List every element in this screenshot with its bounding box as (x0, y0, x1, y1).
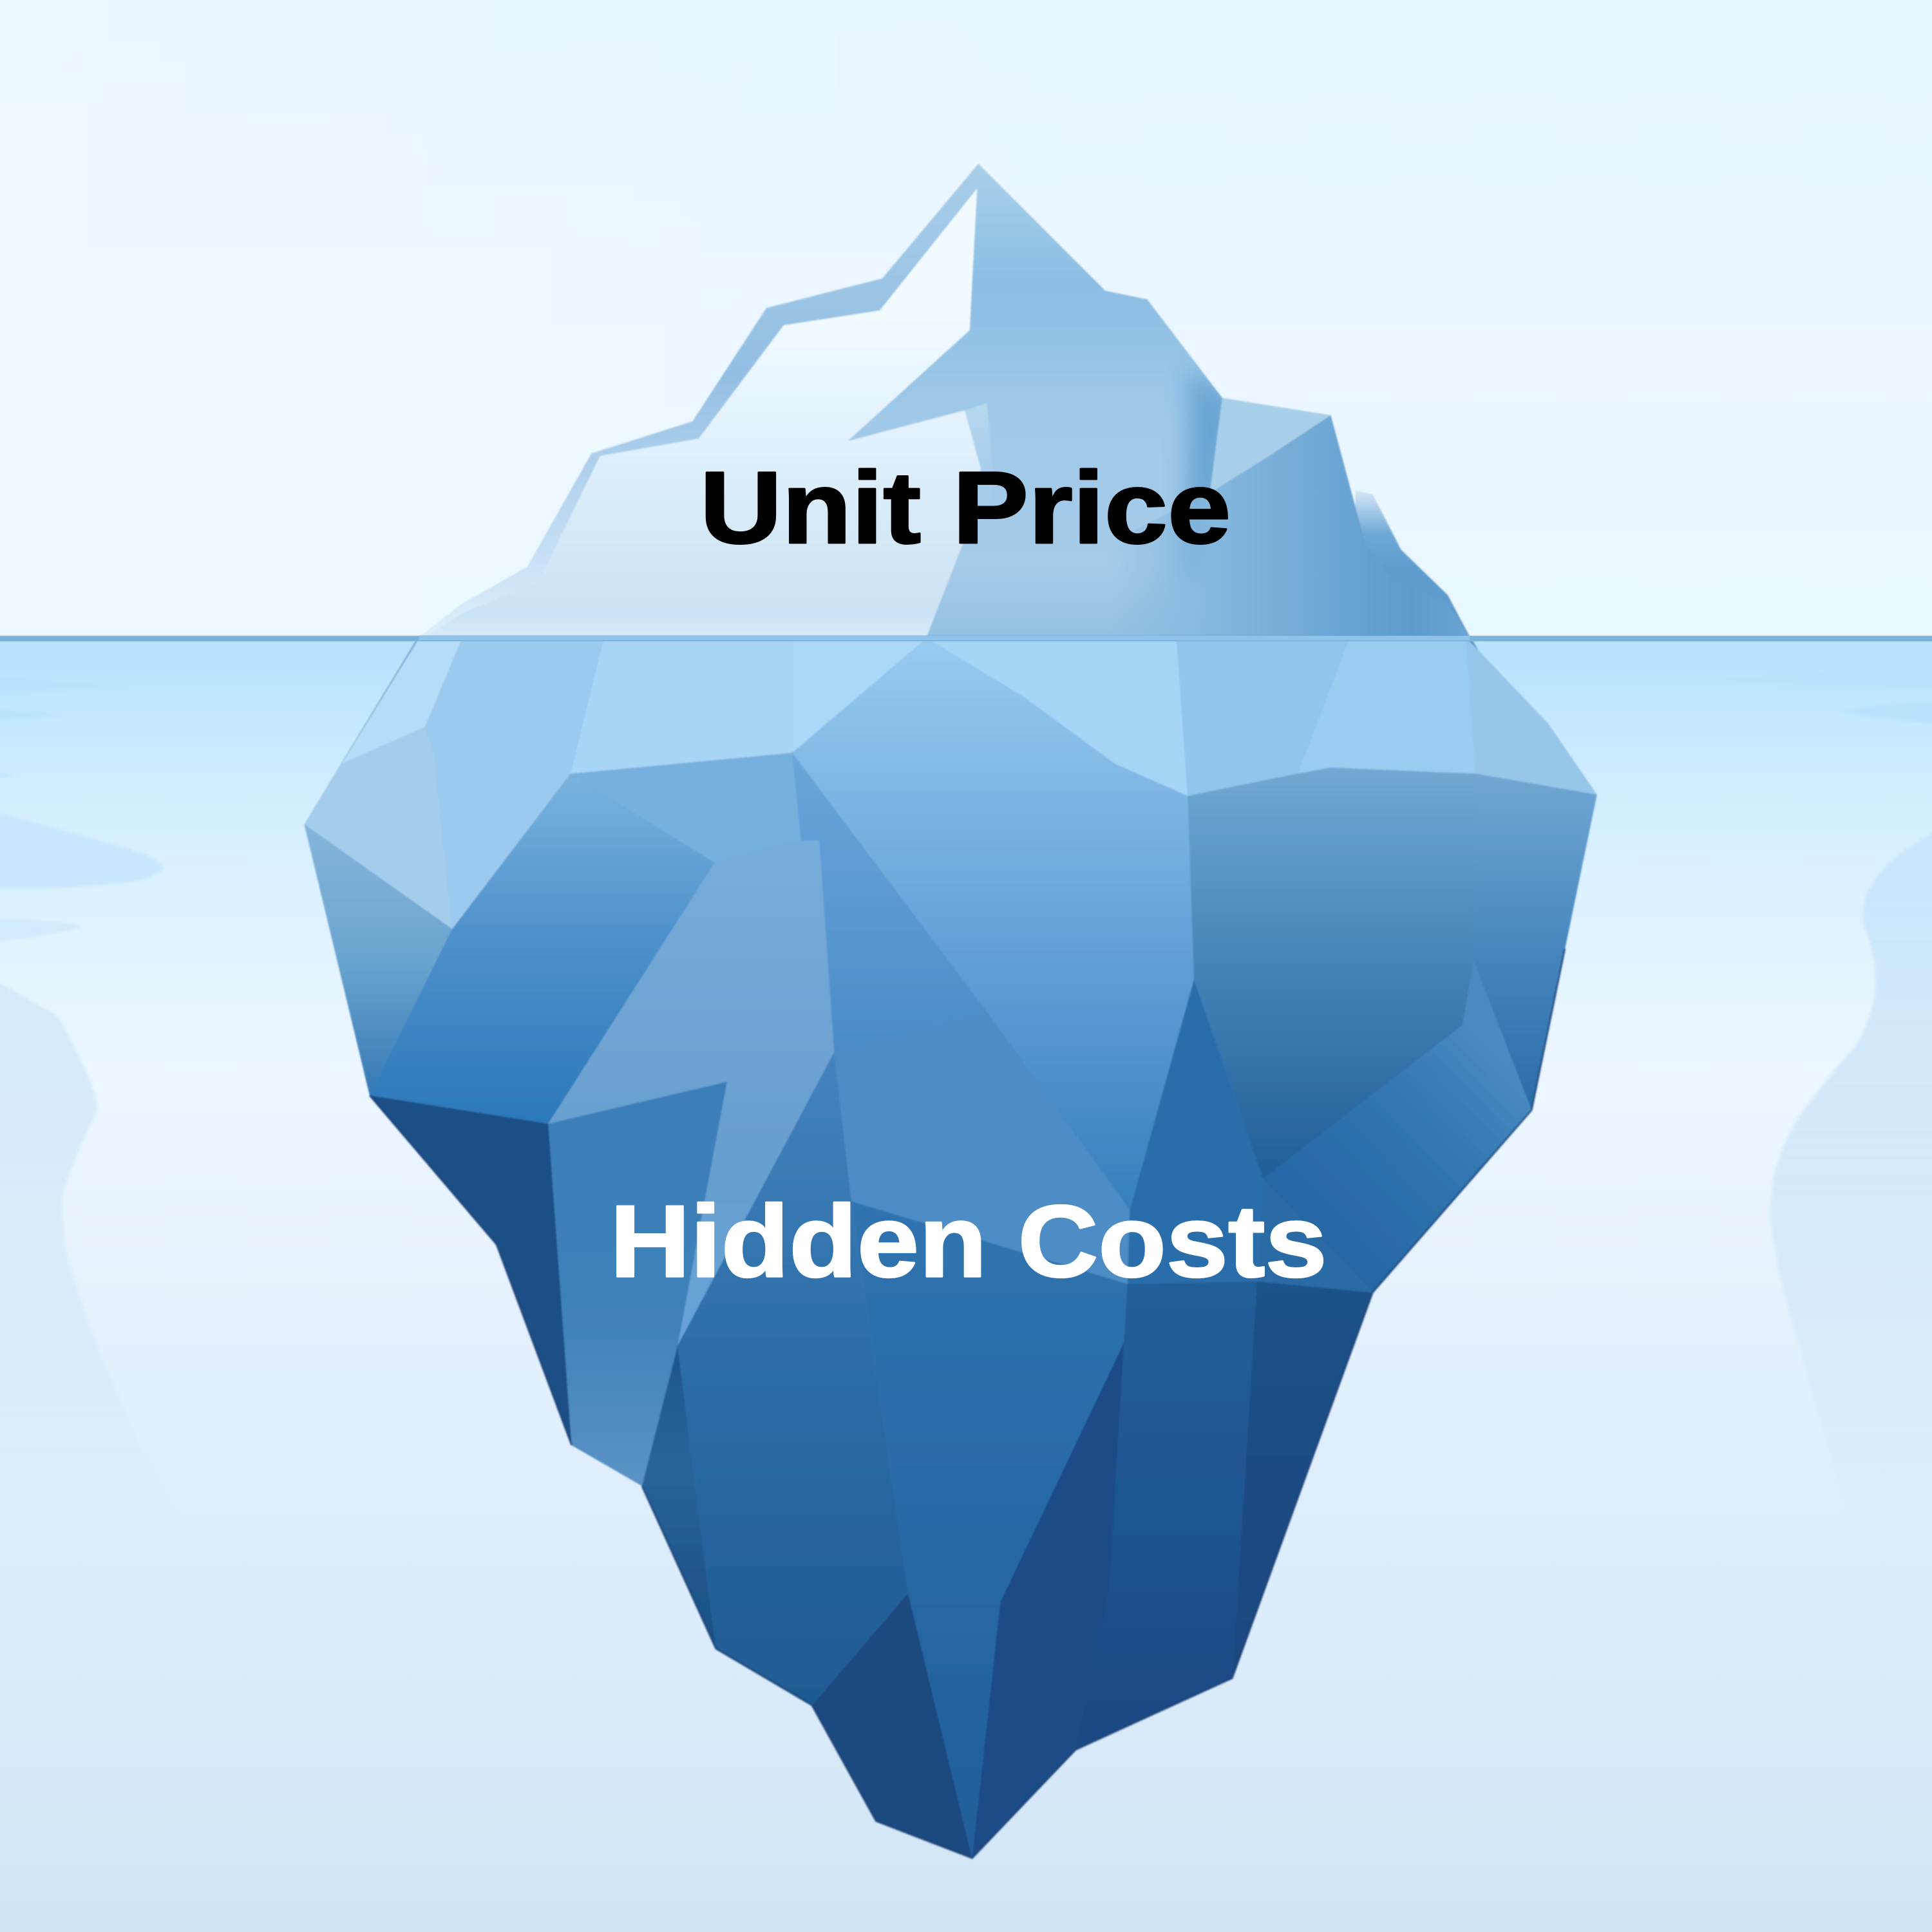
left floating wisp large (0, 807, 164, 889)
left surface wisps (0, 675, 132, 780)
centre facets (792, 753, 986, 1052)
tip rim (419, 164, 1470, 637)
tip side shadow (1174, 367, 1222, 569)
waterline (0, 636, 1932, 641)
right distant iceberg (1770, 819, 1932, 1553)
lower centre facets (851, 1201, 1128, 1858)
iceberg (305, 164, 1597, 1858)
tip peak shaded face (848, 164, 1232, 637)
dark outline on bottom and right edges (642, 949, 1565, 1858)
lower left facets (370, 1095, 572, 1445)
left floating wisp small (0, 918, 84, 944)
sky left glow (0, 0, 1932, 637)
body silhouette (305, 636, 1597, 1858)
dark outline on lower edges (370, 1095, 572, 1445)
tip upper right facet (1210, 398, 1331, 493)
tip lit face (425, 189, 981, 637)
iceberg body below water (305, 636, 1597, 1858)
left distant iceberg (0, 973, 197, 1553)
upper facets (305, 638, 462, 824)
tip right face (1109, 415, 1470, 637)
waterline highlight over iceberg (419, 636, 1470, 640)
label: Hidden Costs: Hidden Costs (610, 1184, 1327, 1298)
water background (0, 637, 1932, 1932)
background distant ice shapes (0, 661, 1932, 1553)
right surface wisps (1705, 661, 1932, 726)
tip bump (1356, 490, 1470, 637)
label: Unit Price: Unit Price (700, 450, 1231, 565)
sky background (0, 0, 1932, 637)
iceberg tip above water (419, 164, 1470, 637)
tip soft inner strip (965, 403, 993, 542)
